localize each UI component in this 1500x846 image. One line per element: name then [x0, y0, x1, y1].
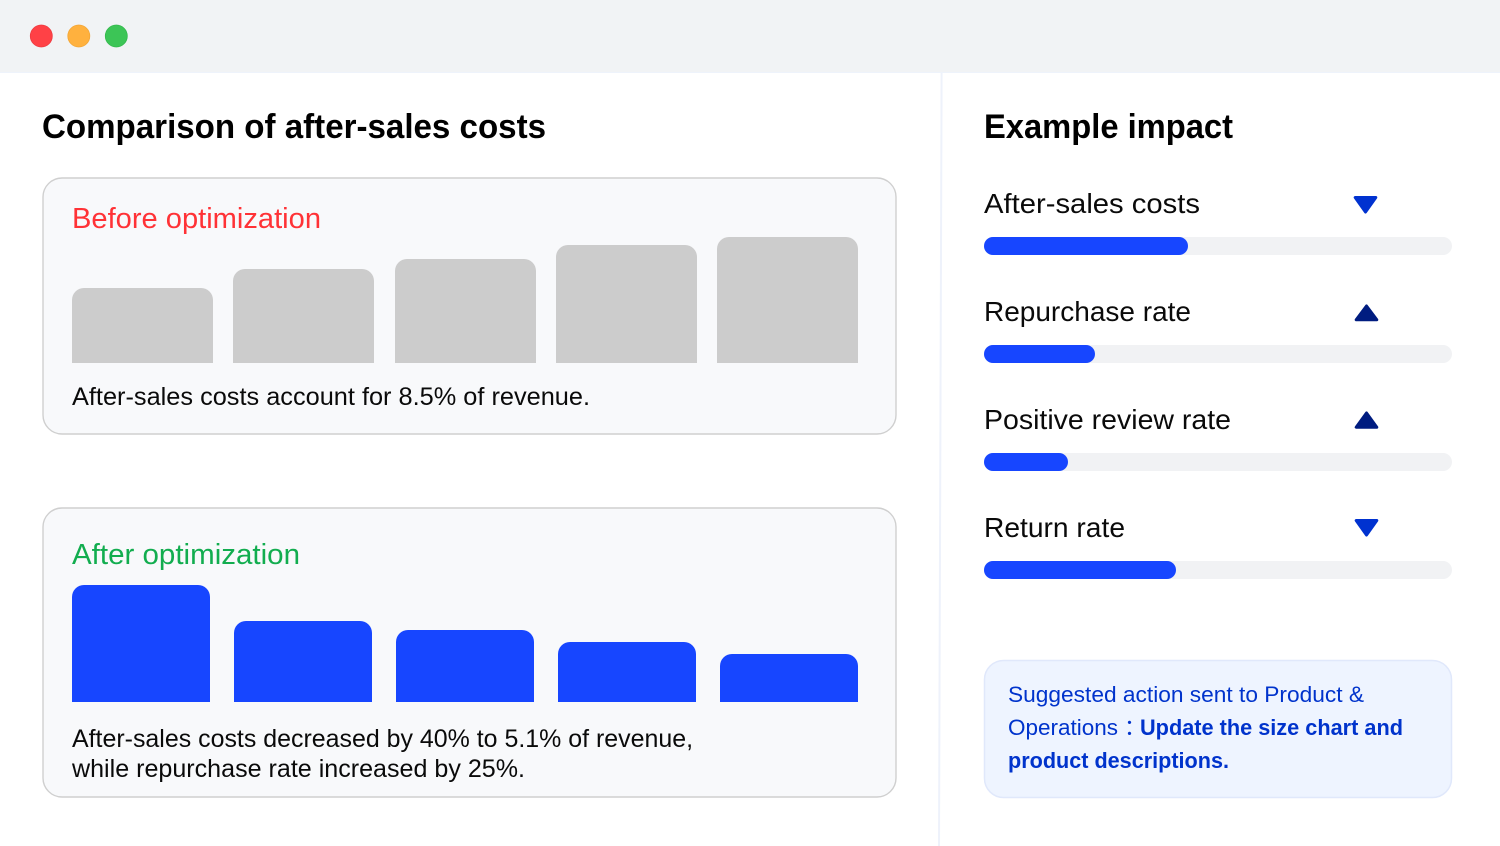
window title bar: [0, 0, 1500, 73]
metric: return rate: Return rate: [984, 512, 1125, 543]
text: suggested action: [1008, 682, 1403, 773]
progress bar: return rate: [984, 561, 1452, 579]
bar chart: after optimization: [72, 585, 858, 702]
icon: orange window dot: [68, 25, 90, 47]
text: after summary: while repurchase rate increased by 25%.: [71, 755, 525, 783]
text: before summary: After-sales costs account for 8.5% of revenue.: [72, 383, 590, 411]
icon: up triangle: [1356, 413, 1377, 427]
bar chart: before optimization: [72, 237, 858, 363]
callout: suggested action: [984, 660, 1452, 798]
text: suggested action: ：: [1124, 715, 1146, 740]
icon: green window dot: [105, 25, 127, 47]
heading: before optimization: Before optimization: [72, 203, 321, 235]
text: suggested action: Operations: [1008, 715, 1118, 740]
panel: after optimization: [43, 508, 896, 797]
metric: positive review rate: Positive review rate: [984, 404, 1231, 435]
heading: after optimization: After optimization: [72, 539, 300, 571]
metric: return rate: [984, 512, 1452, 579]
icon: down triangle: [1356, 520, 1377, 535]
text: suggested action: Update the size chart and: [1140, 715, 1403, 740]
icon: down triangle: [1355, 198, 1376, 212]
heading: comparison of after-sales costs: Comparison of after-sales costs: [42, 108, 546, 146]
text: suggested action: Suggested action sent to Product &: [1008, 682, 1364, 707]
progress bar: positive review rate: [984, 453, 1452, 471]
metric: repurchase rate: [984, 296, 1452, 363]
icon: red window dot: [30, 25, 52, 47]
metric: after-sales costs: [984, 188, 1452, 255]
metric: after-sales costs: After-sales costs: [984, 188, 1200, 219]
progress bar: repurchase rate: [984, 345, 1452, 363]
heading: example impact: Example impact: [984, 108, 1233, 146]
metric: positive review rate: [984, 404, 1452, 471]
panel: before optimization: [43, 178, 896, 434]
text: suggested action: product descriptions.: [1008, 748, 1229, 773]
text: after summary: [71, 725, 693, 783]
text: after summary: After-sales costs decreased by 40% to 5.1% of revenue,: [72, 725, 693, 753]
progress bar: after-sales costs: [984, 237, 1452, 255]
metric: repurchase rate: Repurchase rate: [984, 296, 1191, 327]
icon: up triangle: [1356, 306, 1377, 320]
